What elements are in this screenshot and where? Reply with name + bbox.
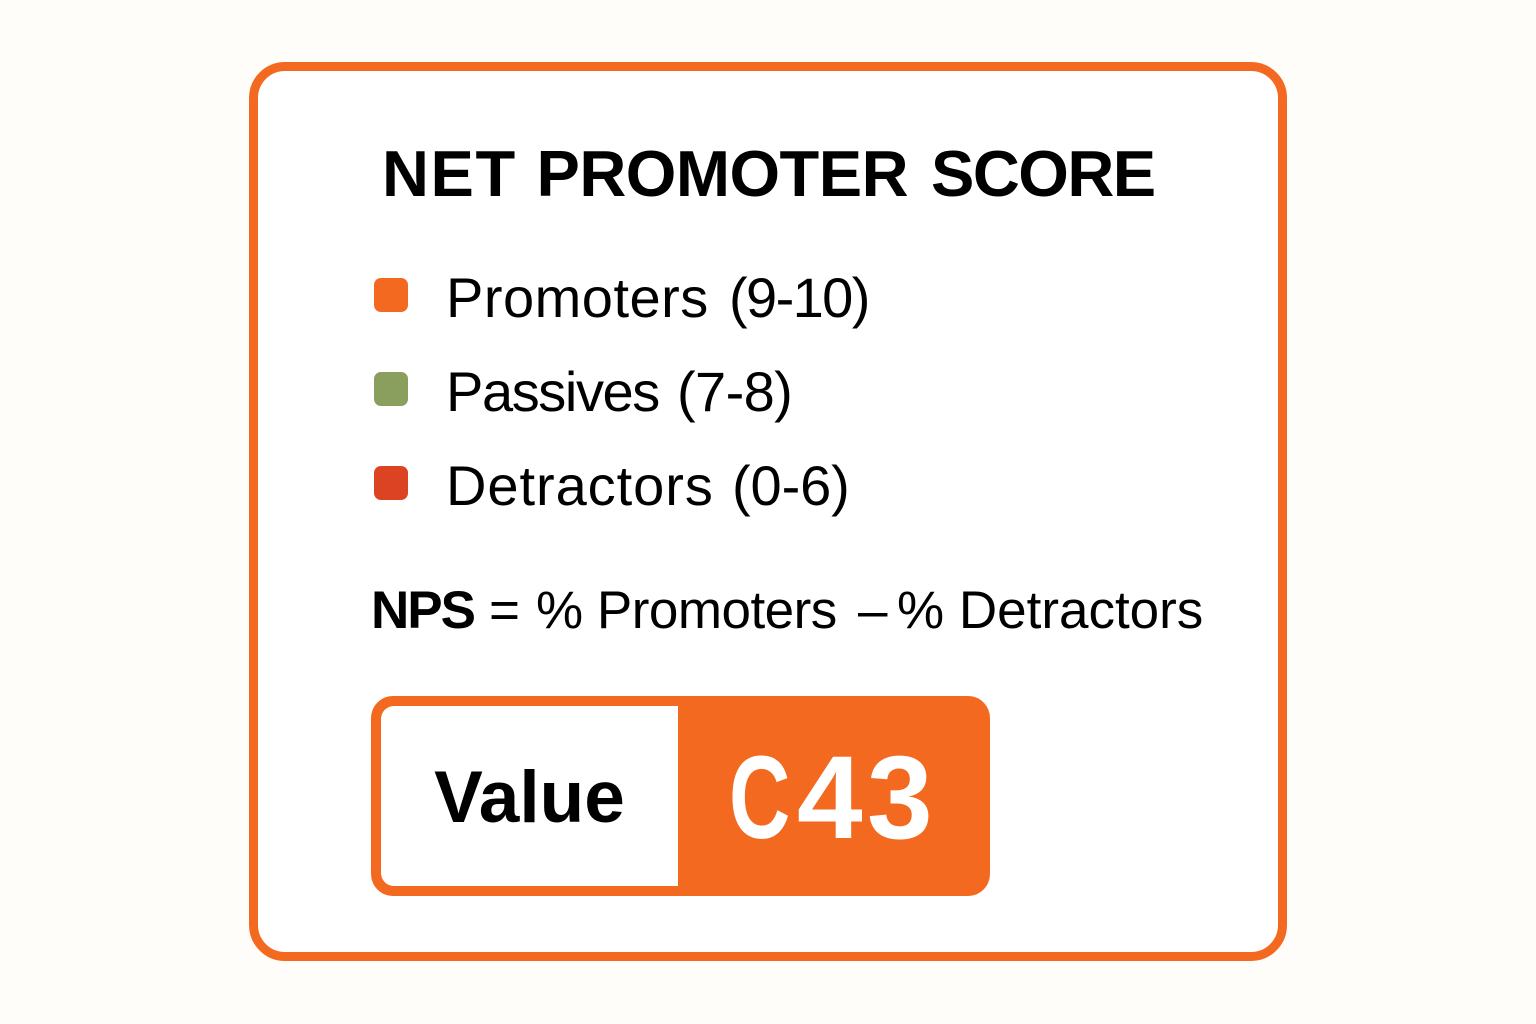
formula: % Detractors — [897, 581, 1203, 640]
panel: NPS card — [249, 62, 1287, 961]
legend: passives — [374, 360, 792, 423]
promoters label — [446, 266, 869, 329]
value box — [371, 696, 990, 896]
value number: 4 — [797, 732, 863, 864]
promoters label: (9-10) — [729, 266, 869, 329]
title: NET — [382, 137, 517, 210]
passives label: Passives — [446, 360, 659, 423]
formula: % Promoters — [536, 581, 837, 640]
passives label: (7-8) — [677, 360, 792, 423]
formula: NPS — [371, 581, 474, 640]
detractors label: (0-6) — [732, 454, 850, 517]
icon: detractors swatch — [374, 466, 408, 500]
title — [382, 137, 1155, 210]
promoters label: Promoters — [446, 266, 709, 329]
icon: passives swatch — [374, 372, 408, 406]
value number: 3 — [867, 732, 933, 864]
value number: C — [729, 732, 790, 864]
detractors label — [446, 454, 850, 517]
formula — [371, 581, 1203, 640]
value label cell: Value — [434, 757, 625, 838]
legend: detractors — [374, 454, 850, 517]
formula: – — [858, 581, 887, 640]
legend: promoters — [374, 266, 869, 329]
title: PROMOTER — [536, 137, 908, 210]
value label cell — [381, 706, 678, 886]
detractors label: Detractors — [446, 454, 714, 517]
icon: promoters swatch — [374, 278, 408, 312]
formula: = — [489, 581, 520, 640]
title: SCORE — [931, 137, 1155, 210]
passives label — [446, 360, 792, 423]
value number — [729, 732, 933, 864]
